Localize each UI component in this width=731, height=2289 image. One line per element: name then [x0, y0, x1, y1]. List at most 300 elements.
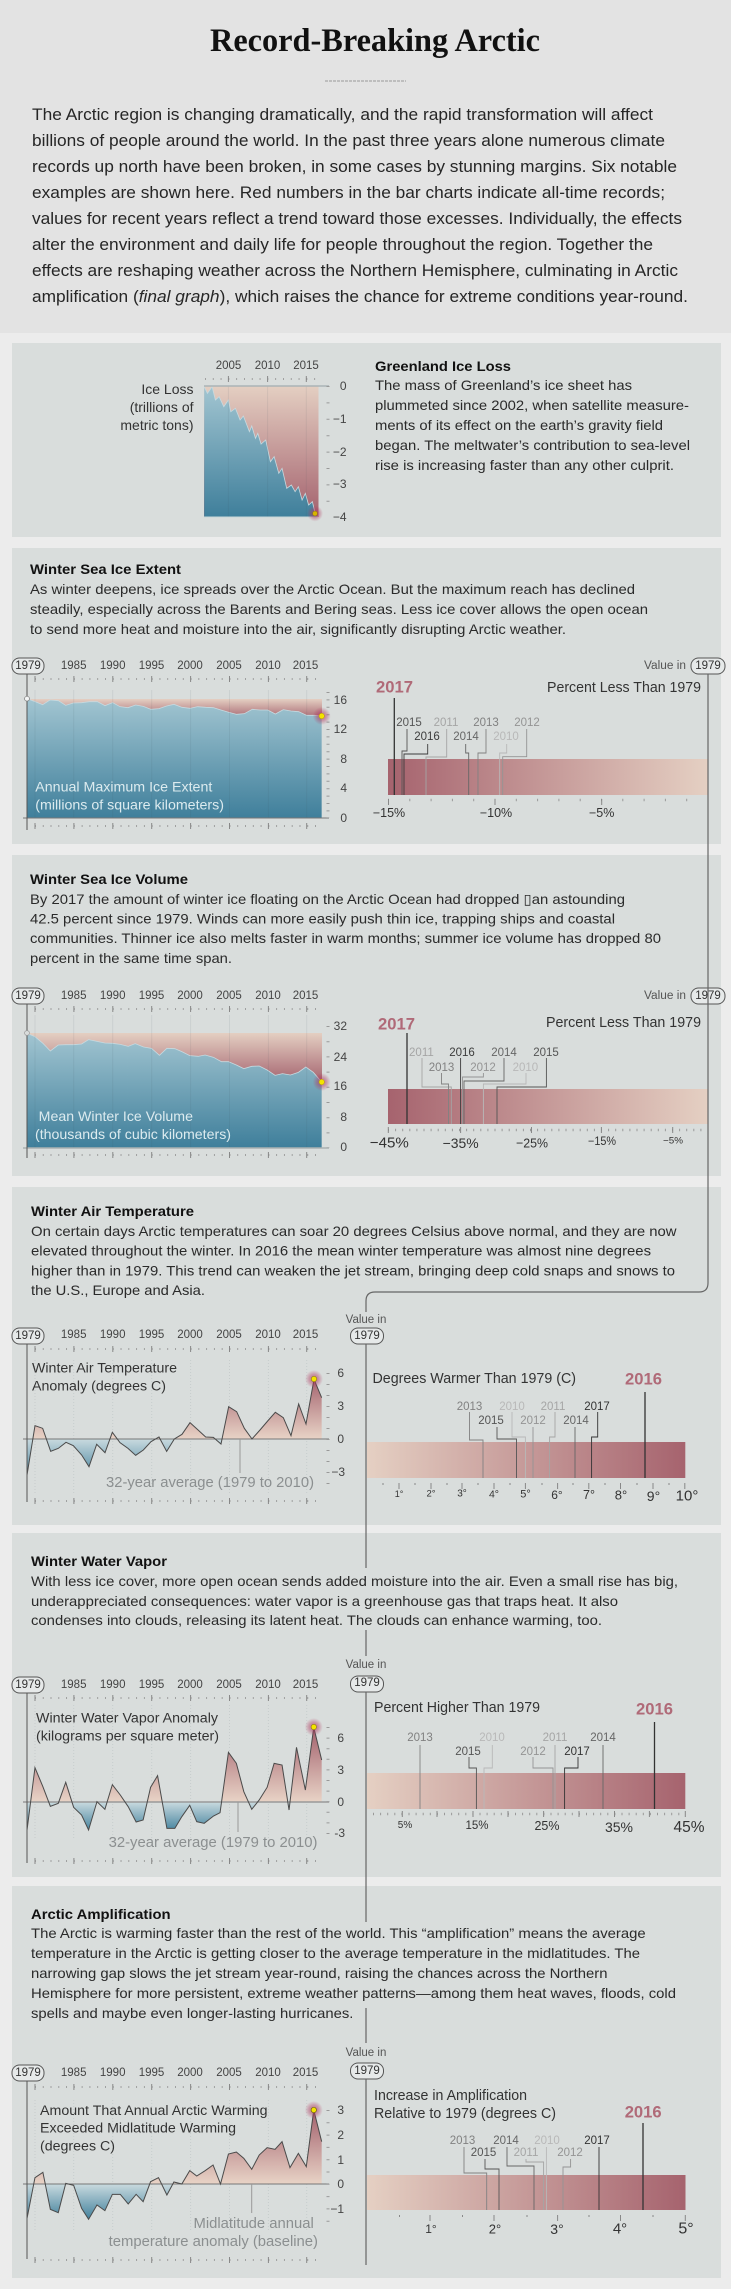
marker 2017: 2017	[584, 2135, 610, 2147]
area chart: ice volume	[12, 988, 347, 1158]
body text: The mass of Greenland’s ice sheet has	[375, 377, 632, 393]
value in 1979: 1979	[354, 1330, 380, 1342]
bar axis: 5%	[398, 1820, 412, 1831]
marker 2011	[409, 1047, 451, 1124]
panel: Winter Water Vapor	[12, 1533, 721, 1877]
body text: Hemisphere for more persistent, extreme weather patterns—among them heat waves, floods, cold	[31, 1985, 676, 2001]
bar chart title: Percent Less Than 1979	[547, 680, 701, 696]
record year 2016: 2016	[625, 1370, 662, 1388]
bar axis: 45%	[673, 1819, 705, 1836]
y axis labels: 4	[340, 781, 347, 795]
record marker	[305, 1370, 323, 1388]
bar axis: 4°	[489, 1488, 499, 1500]
bar chart title	[374, 2088, 556, 2122]
body text: By 2017 the amount of winter ice floating on the Arctic Ocean had dropped ▯an astounding	[30, 891, 625, 907]
y axis labels: 3	[337, 1763, 344, 1777]
marker 2014: 2014	[493, 2135, 519, 2147]
year labels: 1995	[139, 2067, 164, 2079]
heading: Winter Water Vapor	[31, 1553, 168, 1569]
heading: Winter Sea Ice Extent	[30, 561, 181, 577]
marker 2011: 2011	[541, 1401, 565, 1413]
marker 2011: 2011	[543, 1732, 567, 1744]
baseline label: Midlatitude annual	[194, 2216, 314, 2232]
year labels: 1995	[139, 1329, 164, 1341]
bar axis: 2°	[426, 1488, 436, 1500]
body text: 42.5 percent since 1979. Winds can more easily push thin ice, trapping ships and coastal	[30, 910, 615, 926]
body text: On certain days Arctic temperatures can soar 20 degrees Celsius above normal, and they are now	[31, 1223, 677, 1239]
value in 1979: Value in	[644, 660, 686, 672]
chart label	[120, 381, 194, 433]
year labels: 1985	[61, 1329, 86, 1341]
panel: Winter Air Temperature	[12, 1187, 721, 1525]
chart caption: Winter Water Vapor Anomaly	[36, 1710, 218, 1726]
bar chart title: Percent Higher Than 1979	[374, 1700, 540, 1716]
marker 2012: 2012	[470, 1062, 496, 1074]
marker 2013	[407, 1732, 433, 1809]
heading: Arctic Amplification	[31, 1906, 171, 1922]
body text: higher than in 1979. This trend can weaken the jet stream, bringing deep cold snaps and snows to	[31, 1263, 675, 1279]
record marker	[305, 1718, 323, 1736]
intro text: billions of people around the world. In the past three years alone numerous climate	[32, 132, 665, 150]
body text: underappreciated consequences: water vapor is a greenhouse gas that traps heat. It also	[31, 1593, 618, 1609]
bar chart title: Degrees Warmer Than 1979 (C)	[372, 1371, 576, 1387]
pill 1979: 1979	[15, 1330, 41, 1342]
y axis labels: 6	[337, 1731, 344, 1745]
bar axis: 5°	[520, 1488, 531, 1500]
intro text	[32, 106, 688, 306]
body text: percent in the same time span.	[30, 950, 232, 966]
pill 1979	[12, 658, 44, 674]
chart caption	[32, 1360, 177, 1394]
panel: Winter Sea Ice Volume	[12, 855, 725, 1176]
y axis labels: 24	[334, 1050, 347, 1064]
marker 2013	[473, 717, 499, 795]
year labels: 1990	[100, 660, 125, 672]
marker 2010	[493, 731, 519, 795]
intro text: values for recent years reflect a trend toward those excesses. Individually, the effects	[32, 210, 682, 228]
marker 2015: 2015	[471, 2147, 496, 2159]
body text	[30, 581, 648, 637]
y axis labels: 6	[337, 1366, 344, 1380]
year labels: 2005	[216, 990, 242, 1002]
body text	[31, 1925, 676, 2021]
year labels: 1985	[61, 1679, 86, 1691]
body text	[31, 1573, 678, 1628]
marker 2011	[426, 717, 458, 795]
connector line: value in 1979	[366, 674, 708, 2265]
pill 1979: 1979	[15, 2067, 41, 2079]
y axis labels: −1	[333, 412, 347, 426]
y axis labels: −4	[333, 510, 347, 524]
area chart: ice extent	[12, 658, 347, 830]
marker 2013: 2013	[473, 717, 499, 729]
y axis labels: −3	[333, 477, 347, 491]
y axis labels: -3	[334, 1826, 345, 1840]
bar axis	[400, 2215, 694, 2238]
year labels: 2010	[255, 360, 280, 372]
y axis labels: 1	[337, 2153, 344, 2167]
marker 2012	[557, 2147, 583, 2210]
bar chart title: Increase in Amplification	[374, 2088, 527, 2104]
panel: Greenland Ice Loss	[12, 343, 721, 537]
y axis labels: 8	[340, 752, 347, 766]
bar axis: 8°	[615, 1488, 627, 1502]
year labels	[61, 1679, 318, 1691]
marker 2015: 2015	[396, 717, 422, 729]
bar chart: increase in amplification	[346, 2047, 694, 2238]
baseline label	[109, 2216, 318, 2250]
year labels	[216, 360, 319, 372]
marker 2014: 2014	[491, 1047, 517, 1059]
marker 2011: 2011	[514, 2147, 538, 2159]
body text: plummeted since 2002, when satellite measure-	[375, 397, 689, 413]
y axis labels: −1	[330, 2202, 344, 2216]
value in 1979: Value in	[644, 990, 686, 1002]
body text	[375, 377, 690, 473]
y axis labels	[330, 2103, 344, 2216]
value in 1979	[644, 988, 725, 1004]
pill 1979	[12, 2065, 44, 2081]
pill 1979	[12, 1677, 44, 1693]
year labels: 2015	[293, 2067, 318, 2079]
marker 2010: 2010	[479, 1732, 505, 1744]
body text	[30, 891, 661, 966]
bar axis: −45%	[370, 1134, 409, 1152]
marker 2013	[429, 1062, 454, 1124]
marker 2014	[453, 731, 479, 795]
record year 2017: 2017	[378, 1014, 415, 1034]
y axis labels	[331, 1366, 345, 1479]
bar axis: −5%	[589, 806, 614, 820]
body text	[31, 1223, 677, 1298]
y axis labels: 0	[340, 1140, 347, 1154]
y axis labels: 12	[334, 722, 347, 736]
marker 2014	[563, 1415, 589, 1478]
intro text: records up north have been broken, in some cases by stunning margins. Six notable	[32, 158, 677, 176]
marker 2014: 2014	[453, 731, 479, 743]
record year 2016: 2016	[636, 1700, 673, 1718]
average label: 32-year average (1979 to 2010)	[106, 1475, 314, 1491]
marker 2016	[449, 1047, 475, 1124]
marker 2017: 2017	[564, 1746, 590, 1758]
heading: Winter Sea Ice Volume	[30, 871, 188, 887]
marker 2013: 2013	[457, 1401, 482, 1413]
chart label: (trillions of	[130, 399, 194, 415]
y axis labels: 3	[337, 1399, 344, 1413]
bar axis: 2°	[489, 2222, 501, 2236]
value in 1979: 1979	[354, 2065, 380, 2077]
marker 2011	[543, 1732, 567, 1809]
year labels: 2010	[255, 1679, 281, 1691]
chart caption: Mean Winter Ice Volume	[39, 1108, 193, 1124]
y axis labels: 16	[334, 1079, 347, 1093]
intro text: effects are reshaping weather across the Northern Hemisphere, culminating in Arctic	[32, 262, 678, 280]
line chart: amplification	[12, 2065, 344, 2263]
marker 2011	[541, 1401, 565, 1478]
bar axis: 10°	[676, 1488, 698, 1504]
chart caption: Exceeded Midlatitude Warming	[40, 2120, 236, 2136]
body text: temperature in the Arctic is getting closer to the average temperature in the midlatitudes. The	[31, 1945, 640, 1961]
bar axis: 7°	[583, 1488, 595, 1502]
marker 2014	[590, 1732, 616, 1809]
bar axis: 15%	[465, 1820, 489, 1832]
y axis labels: 0	[340, 811, 347, 825]
marker 2016: 2016	[414, 731, 440, 743]
y axis labels: 32	[334, 1019, 347, 1033]
year labels: 2010	[255, 1329, 281, 1341]
marker 2010: 2010	[513, 1062, 538, 1074]
line chart: air temperature anomaly	[12, 1328, 345, 1504]
record year 2016: 2016	[625, 2102, 662, 2122]
baseline label: temperature anomaly (baseline)	[109, 2234, 318, 2250]
body text: the U.S., Europe and Asia.	[31, 1282, 205, 1298]
bar chart: percent less than 1979	[370, 988, 725, 1152]
body text: to send more heat and moisture into the air, significantly disrupting Arctic weather.	[30, 621, 566, 637]
marker 2013: 2013	[407, 1732, 433, 1744]
value in 1979	[346, 1659, 386, 1692]
year labels: 1990	[100, 1679, 125, 1691]
marker 2014	[464, 1047, 517, 1124]
record year 2017	[378, 1014, 415, 1124]
bar axis: 35%	[605, 1819, 633, 1835]
pill 1979	[12, 988, 44, 1004]
record marker	[305, 2101, 323, 2119]
body text: As winter deepens, ice spreads over the Arctic Ocean. But the maximum reach has declined	[30, 581, 635, 597]
bar chart title: Relative to 1979 (degrees C)	[374, 2106, 556, 2122]
chart caption: Amount That Annual Arctic Warming	[40, 2103, 268, 2118]
record year 2017	[376, 678, 413, 795]
year labels: 2010	[255, 990, 281, 1002]
year labels: 2015	[293, 1329, 318, 1341]
marker 2010	[479, 1732, 505, 1809]
year labels: 1990	[100, 1329, 125, 1341]
marker 2016	[404, 731, 440, 795]
year labels: 1985	[61, 2067, 86, 2079]
year labels: 2000	[177, 2067, 203, 2079]
marker 2015: 2015	[455, 1746, 481, 1758]
marker 2015	[455, 1746, 481, 1809]
bar chart: percent less than 1979	[373, 658, 725, 820]
marker 2012: 2012	[520, 1415, 546, 1427]
marker 2017	[564, 1746, 590, 1809]
y axis labels	[334, 1731, 345, 1840]
bar axis: 25%	[534, 1819, 560, 1833]
marker 2012: 2012	[520, 1746, 546, 1758]
record year 2016	[625, 1370, 662, 1478]
chart caption: (millions of square kilometers)	[35, 797, 224, 813]
line chart: water vapor anomaly	[12, 1677, 345, 1864]
y axis labels: 16	[334, 693, 347, 707]
chart caption: Anomaly (degrees C)	[32, 1378, 166, 1394]
record year 2016	[636, 1700, 673, 1809]
y axis labels: −2	[333, 445, 347, 459]
marker 2015	[471, 2147, 499, 2210]
bar axis: −25%	[516, 1136, 548, 1150]
marker 2016: 2016	[449, 1047, 475, 1059]
marker 2010	[534, 2135, 560, 2210]
intro text: alter the environment and daily life for people throughout the region. Together the	[32, 236, 653, 254]
y axis labels	[334, 693, 347, 825]
body text: With less ice cover, more open ocean sends added moisture into the air. Even a small rise has big,	[31, 1573, 678, 1589]
body text: communities. Thinner ice also melts faster in warm months; summer ice volume has dropped 80	[30, 930, 661, 946]
pill 1979: 1979	[15, 990, 41, 1002]
value in 1979	[346, 1314, 386, 1344]
y axis labels: 0	[337, 2177, 344, 2191]
year labels: 2010	[255, 2067, 281, 2079]
bar axis: −10%	[480, 806, 512, 820]
marker 2013	[450, 2135, 487, 2210]
bar axis: −35%	[443, 1135, 479, 1151]
marker 2010	[483, 1062, 538, 1124]
year labels: 2000	[177, 1329, 203, 1341]
body text: began. The meltwater’s contribution to sea-level	[375, 437, 690, 453]
marker 2014: 2014	[590, 1732, 616, 1744]
value in 1979	[644, 658, 725, 674]
marker 2014	[493, 2135, 534, 2210]
bar chart: percent higher than 1979	[346, 1659, 705, 1836]
body text: condenses into clouds, releasing its latent heat. The clouds can enhance warming, too.	[31, 1612, 602, 1628]
body text: spells and maybe even longer-lasting hurricanes.	[31, 2005, 353, 2021]
value in 1979: 1979	[354, 1677, 380, 1689]
year labels	[61, 660, 318, 672]
value in 1979: Value in	[346, 1314, 386, 1326]
bar axis: −5%	[663, 1136, 684, 1146]
body text: elevated throughout the winter. In 2016 the mean winter temperature was almost nine degrees	[31, 1243, 651, 1259]
bar axis	[373, 1811, 705, 1836]
marker 2013: 2013	[450, 2135, 475, 2147]
bar axis: −15%	[588, 1136, 616, 1148]
year labels: 2000	[177, 990, 203, 1002]
year labels: 2015	[293, 360, 319, 372]
heading: Greenland Ice Loss	[375, 358, 511, 374]
chart caption: (degrees C)	[40, 2138, 115, 2154]
year labels: 2015	[293, 990, 318, 1002]
year labels: 2005	[216, 2067, 242, 2079]
year labels	[61, 1329, 318, 1341]
marker 2012	[520, 1746, 553, 1809]
bar chart title: Percent Less Than 1979	[546, 1015, 701, 1031]
chart caption: Winter Air Temperature	[32, 1360, 177, 1376]
value in 1979: Value in	[346, 1659, 386, 1671]
marker 2015	[478, 1415, 516, 1478]
year labels: 2010	[255, 660, 281, 672]
marker 2010	[499, 1401, 525, 1478]
marker 2017	[584, 1401, 610, 1478]
bar axis: 6°	[551, 1488, 563, 1502]
pill 1979	[12, 1328, 44, 1344]
chart caption	[36, 1710, 219, 1744]
start marker 1979	[25, 1031, 29, 1035]
y axis labels: 8	[340, 1110, 347, 1124]
year labels	[61, 2067, 318, 2079]
marker 2011: 2011	[434, 717, 458, 729]
title: Record-Breaking Arctic	[210, 23, 540, 59]
record year 2016	[625, 2102, 662, 2210]
marker 2010: 2010	[499, 1401, 525, 1413]
pill 1979: 1979	[15, 660, 41, 672]
bar axis: 3°	[550, 2221, 564, 2237]
chart caption	[40, 2103, 268, 2154]
chart label: Ice Loss	[141, 381, 194, 397]
marker 2013	[457, 1401, 483, 1478]
marker 2012: 2012	[514, 717, 540, 729]
bar axis: 1°	[395, 1489, 404, 1499]
bar axis: −15%	[373, 806, 405, 820]
year labels: 1995	[139, 660, 164, 672]
year labels: 1995	[139, 990, 164, 1002]
year labels: 2015	[293, 1679, 318, 1691]
marker 2012	[462, 1062, 496, 1124]
chart caption: (thousands of cubic kilometers)	[35, 1126, 231, 1142]
start marker 1979	[25, 696, 29, 701]
marker 2017: 2017	[584, 1401, 610, 1413]
y axis labels	[333, 379, 347, 524]
value in 1979: Value in	[346, 2047, 386, 2059]
bar axis	[373, 799, 707, 820]
year labels: 1990	[100, 2067, 125, 2079]
bar axis: 9°	[647, 1488, 660, 1504]
chart caption	[35, 779, 224, 813]
body text: narrowing gap slows the jet stream year-round, raising the chances across the Northern	[31, 1965, 608, 1981]
year labels: 2015	[293, 660, 318, 672]
marker 2012: 2012	[557, 2147, 583, 2159]
chart caption: (kilograms per square meter)	[36, 1728, 219, 1744]
marker 2015: 2015	[533, 1047, 559, 1059]
intro text: examples are shown here. Red numbers in the bar charts indicate all-time records;	[32, 184, 665, 202]
year labels: 1985	[61, 990, 86, 1002]
y axis labels: 0	[337, 1795, 344, 1809]
marker 2011	[514, 2147, 544, 2210]
year labels: 2005	[216, 1679, 242, 1691]
body text: ments of its effect on the earth’s gravity field	[375, 417, 663, 433]
year labels: 1985	[61, 660, 86, 672]
intro text: The Arctic region is changing dramatically, and the rapid transformation will affect	[32, 106, 653, 124]
y axis labels	[334, 1019, 347, 1154]
marker 2017	[584, 2135, 610, 2210]
bar axis: 4°	[613, 2220, 627, 2238]
year labels: 2000	[177, 660, 203, 672]
body text: rise is increasing faster than any other culprit.	[375, 457, 674, 473]
y axis labels: 0	[340, 379, 347, 393]
body text: steadily, especially across the Barents and Bering seas. Less ice cover allows the open ocean	[30, 601, 648, 617]
year labels: 1995	[139, 1679, 164, 1691]
body text: The Arctic is warming faster than the rest of the world. This “amplification” means the average	[31, 1925, 646, 1941]
heading: Winter Air Temperature	[31, 1203, 194, 1219]
marker 2010: 2010	[493, 731, 519, 743]
year labels	[61, 990, 318, 1002]
value in 1979: 1979	[695, 660, 721, 672]
record year 2017: 2017	[376, 678, 413, 696]
y axis labels: 0	[337, 1432, 344, 1446]
marker 2013: 2013	[429, 1062, 454, 1074]
marker 2011: 2011	[409, 1047, 434, 1059]
marker 2012	[520, 1415, 546, 1478]
value in 1979	[346, 2047, 386, 2079]
year labels: 1990	[100, 990, 125, 1002]
chart caption: Annual Maximum Ice Extent	[35, 779, 212, 795]
bar axis: 1°	[425, 2222, 437, 2236]
bar axis: 5°	[678, 2220, 694, 2238]
bar axis	[370, 1127, 703, 1152]
bar axis: 3°	[457, 1488, 467, 1500]
y axis labels: −3	[331, 1465, 345, 1479]
panel: Arctic Amplification	[12, 1886, 721, 2278]
marker 2015: 2015	[478, 1415, 504, 1427]
record marker	[307, 506, 323, 522]
average label: 32-year average (1979 to 2010)	[109, 1835, 317, 1851]
intro text: amplification ( final graph), which raises the chance for extreme conditions year-round.	[32, 288, 688, 306]
y axis labels: 3	[337, 2103, 344, 2117]
